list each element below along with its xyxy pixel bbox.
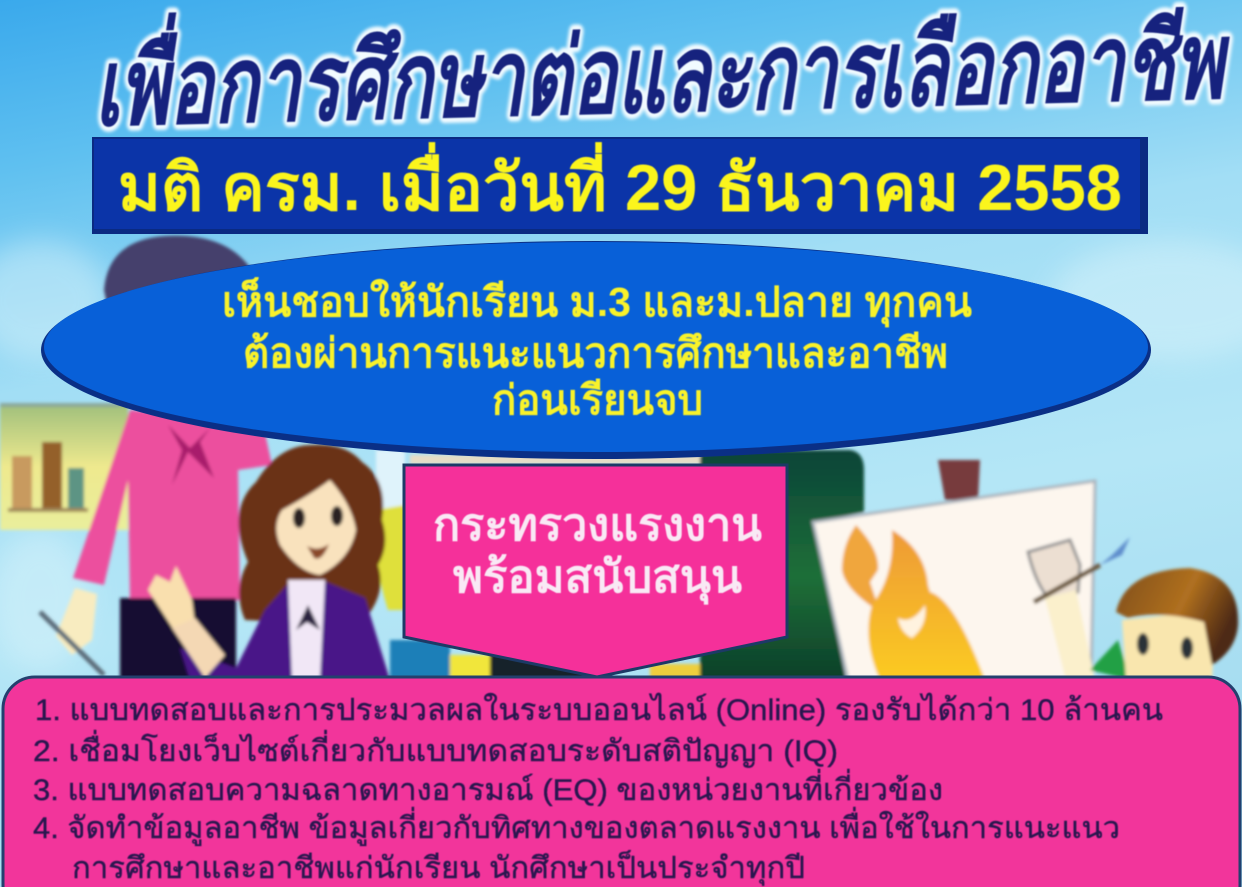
list item 4: 4. จัดทำข้อมูลอาชีพ ข้อมูลเกี่ยวกับทิศทางของตลาดแรงงาน เพื่อใช้ในการแนะแนว <box>33 807 1120 846</box>
bottom pink list panel <box>3 677 1240 887</box>
arrow line 2: พร้อมสนับสนุน <box>453 551 742 605</box>
list item 4 continued: การศึกษาและอาชีพแก่นักเรียน นักศึกษาเป็นประจำทุกปี <box>72 849 805 887</box>
teacher <box>40 236 272 680</box>
date banner: มติ ครม. เมื่อวันที่ 29 ธันวาคม 2558 <box>118 142 1122 224</box>
student girl <box>148 445 390 680</box>
list item 2: 2. เชื่อมโยงเว็บไซต์เกี่ยวกับแบบทดสอบระดับสติปัญญา (IQ) <box>33 730 838 768</box>
list item 1: 1. แบบทดสอบและการประมวลผลในระบบออนไลน์ (Online) รองรับได้กว่า 10 ล้านคน <box>35 692 1163 727</box>
callout line 1: เห็นชอบให้นักเรียน ม.3 และม.ปลาย ทุกคน <box>222 277 972 328</box>
list item 3: 3. แบบทดสอบความฉลาดทางอารมณ์ (EQ) ของหน่วยงานที่เกี่ยวข้อง <box>33 769 943 807</box>
boy with paintbrush <box>1028 537 1238 680</box>
clouds <box>0 240 1242 670</box>
flame painting <box>842 525 880 612</box>
callout line 2: ต้องผ่านการแนะแนวการศึกษาและอาชีพ <box>243 330 948 376</box>
blue ellipse callout <box>41 241 1151 459</box>
chart board <box>0 403 128 530</box>
pink arrow callout <box>404 465 787 677</box>
illustration: teacher and students <box>0 236 1238 680</box>
figure behind the arrow <box>375 450 730 680</box>
green tree <box>700 450 864 680</box>
easel and painting <box>813 460 1095 680</box>
arrow line 1: กระทรวงแรงงาน <box>433 499 762 550</box>
callout line 3: ก่อนเรียนจบ <box>492 377 703 423</box>
